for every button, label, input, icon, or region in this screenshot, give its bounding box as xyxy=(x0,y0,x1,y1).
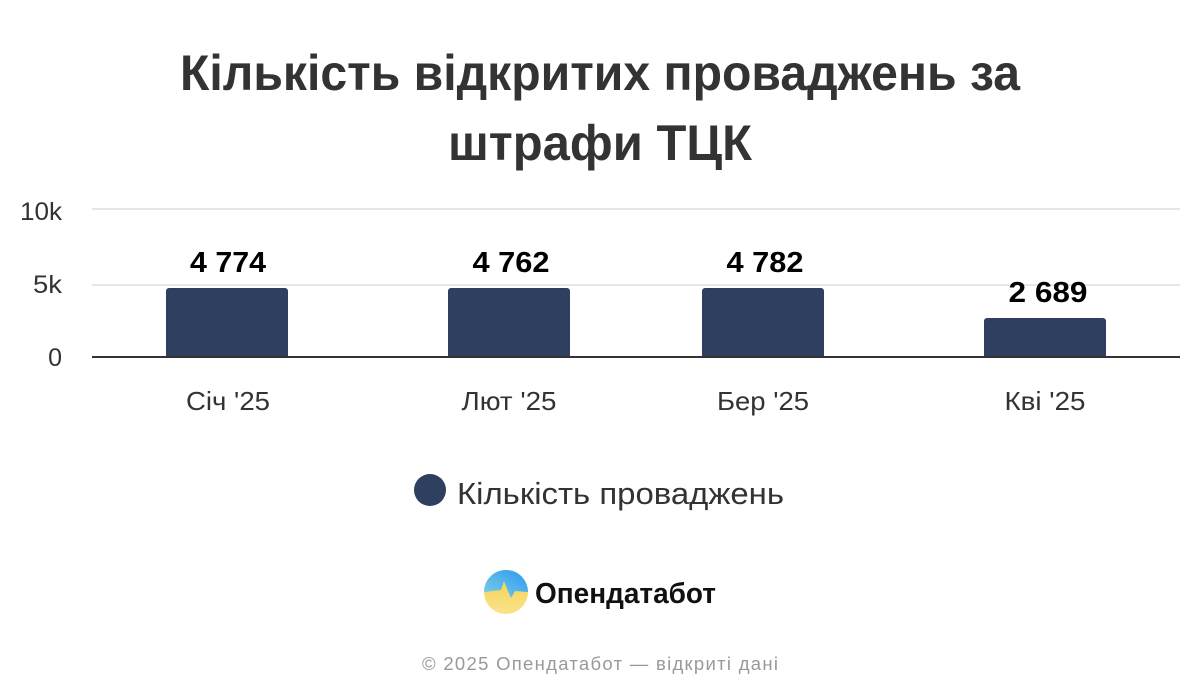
logo xyxy=(484,570,716,614)
icon: logo mark xyxy=(484,570,528,614)
value labels: 4 762 xyxy=(472,247,550,279)
y axis labels: 5k xyxy=(33,271,63,299)
x axis labels xyxy=(186,386,1086,416)
value labels xyxy=(190,247,1088,309)
logo: Опендатабот xyxy=(535,578,716,610)
legend: Кількість проваджень xyxy=(457,476,784,511)
y axis labels: 0 xyxy=(48,344,62,372)
x axis labels: Лют '25 xyxy=(462,386,556,416)
value labels: 4 782 xyxy=(726,247,804,279)
value labels: 4 774 xyxy=(190,247,266,279)
title xyxy=(180,45,1021,171)
bars xyxy=(166,288,1106,357)
title: штрафи ТЦК xyxy=(448,115,752,171)
value labels: 2 689 xyxy=(1008,277,1088,309)
y axis labels: 10k xyxy=(20,198,63,226)
title: Кількість відкритих проваджень за xyxy=(180,45,1021,101)
x axis labels: Кві '25 xyxy=(1004,386,1086,416)
x axis labels: Січ '25 xyxy=(186,386,270,416)
x axis labels: Бер '25 xyxy=(717,386,809,416)
y axis labels xyxy=(20,198,63,372)
footer: © 2025 Опендатабот — відкриті дані xyxy=(422,653,778,674)
bar chart xyxy=(20,198,1180,416)
